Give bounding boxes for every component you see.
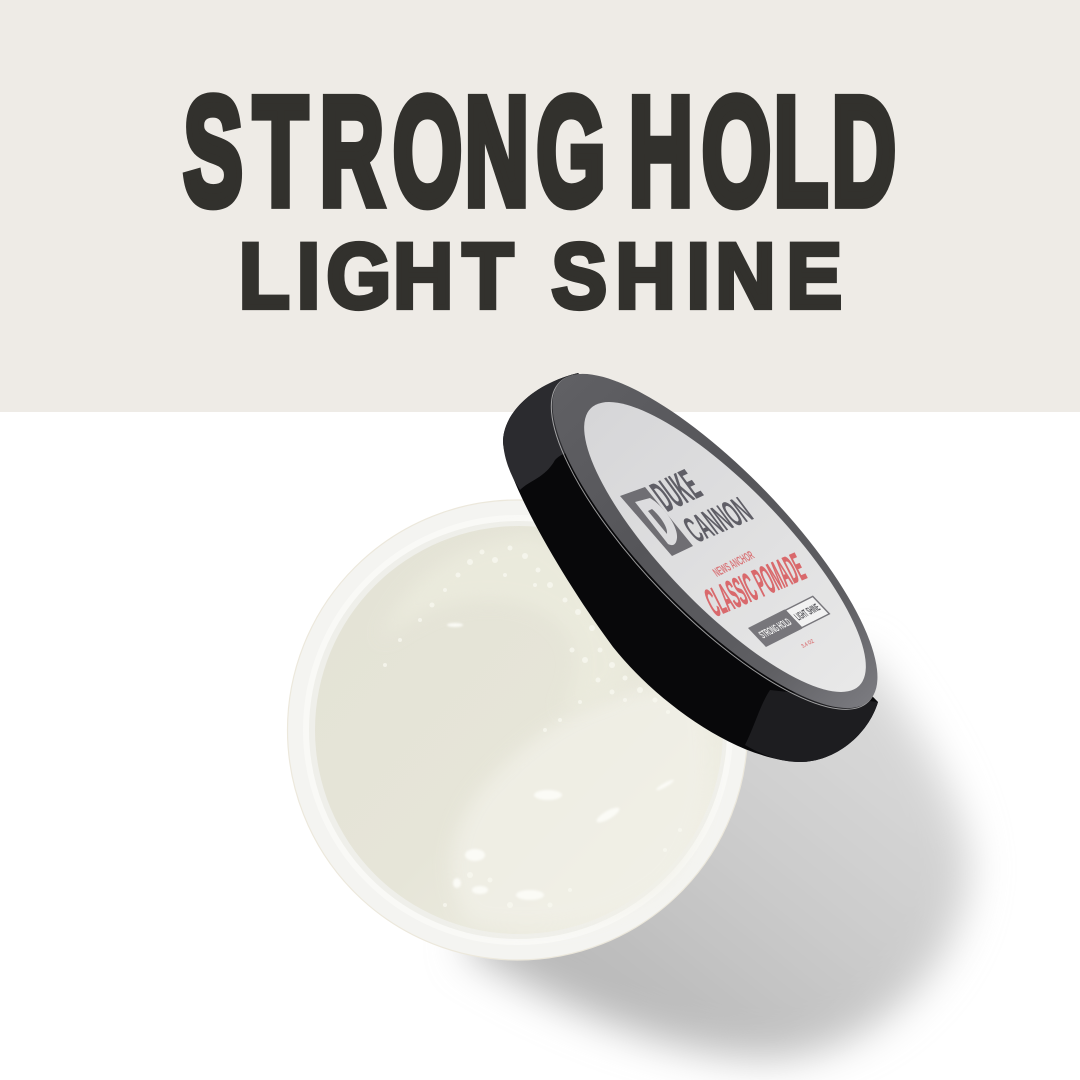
heading [184, 66, 896, 327]
top beige band [0, 0, 1080, 412]
logo D letter [635, 498, 677, 545]
jar outer rim [288, 500, 748, 960]
lid rim edge highlight [508, 332, 920, 752]
lid [503, 332, 920, 762]
lid label artwork: DUKE [642, 461, 710, 520]
lid label artwork [620, 461, 830, 650]
lid label artwork: CANNON [676, 490, 760, 550]
lid side lower sheen [745, 690, 878, 762]
infographic canvas: CLASSIC POMADE [698, 545, 812, 625]
badge: light shine [785, 596, 829, 628]
lid label [548, 366, 902, 728]
pomade lighter swirl [452, 688, 710, 927]
heading line: strong hold: STRONGHOLD [184, 66, 896, 237]
lid side wall [503, 373, 878, 762]
lid side upper sheen [503, 373, 610, 490]
logo D box [620, 487, 693, 556]
lid top rim [510, 332, 920, 750]
open jar [288, 500, 748, 960]
pomade highlights [447, 623, 675, 900]
label badge [748, 596, 830, 647]
heading line: light shine: LIGHTSHINE [239, 224, 842, 327]
pomade surface [315, 526, 723, 934]
jar inner band [306, 518, 730, 942]
badge: strong hold [748, 610, 802, 647]
pomade upper foam [380, 535, 626, 710]
label badge: LIGHT SHINE [791, 601, 823, 623]
label badge: STRONG HOLD [756, 616, 795, 641]
lid label artwork: NEWS ANCHOR [710, 548, 757, 579]
net weight: 3.4 OZ [801, 639, 816, 650]
cast shadow [465, 650, 970, 1058]
pomade bubbles [383, 546, 682, 908]
